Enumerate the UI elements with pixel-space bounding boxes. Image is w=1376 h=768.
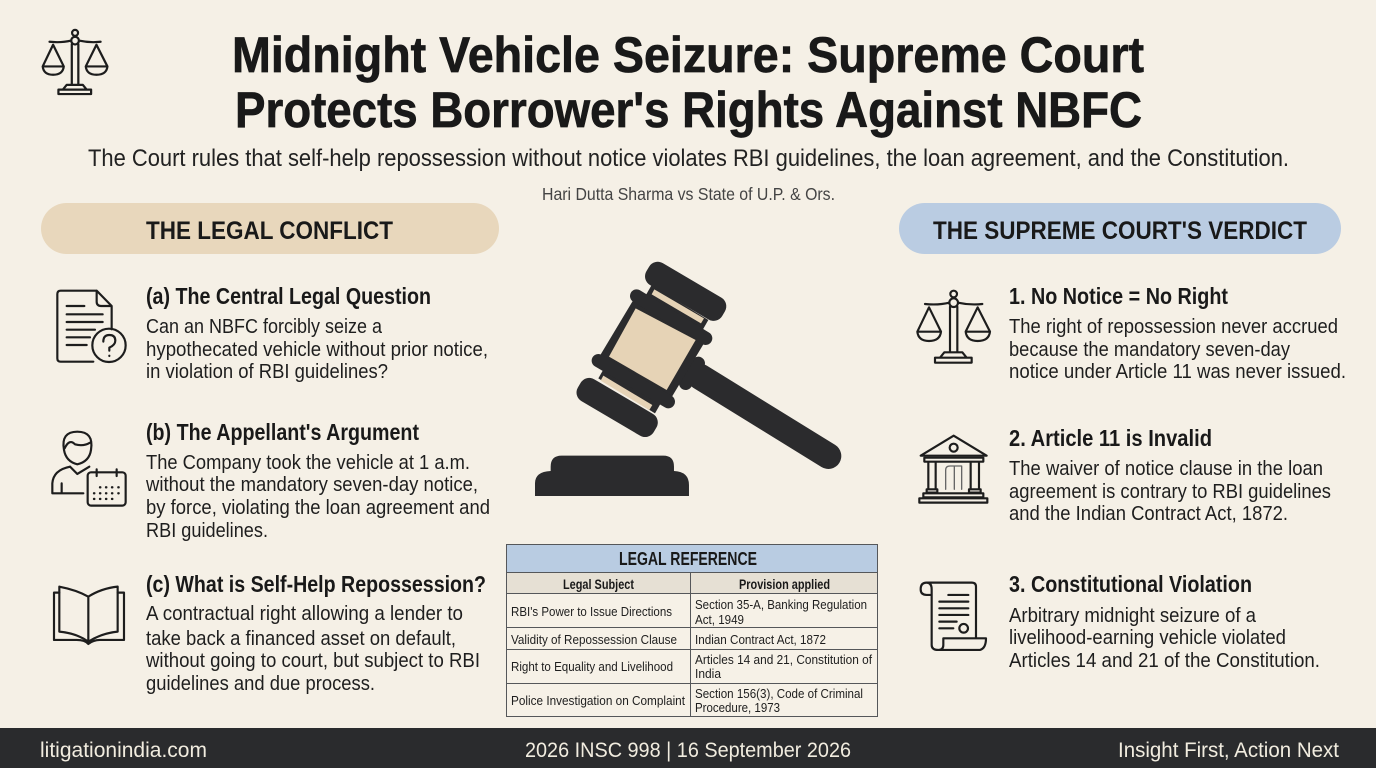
footer bar: 2026 INSC 998 | 16 September 2026	[525, 739, 851, 762]
table: legal reference: Act, 1949	[695, 612, 744, 627]
title	[232, 27, 1144, 138]
text block: self-help repossession	[145, 571, 486, 695]
icon: open book	[54, 587, 124, 644]
heading: the supreme court's verdict: THE SUPREME COURT'S VERDICT	[933, 217, 1307, 245]
text block: no notice no right	[1009, 283, 1346, 383]
text block: appellant's argument	[145, 419, 490, 542]
text block: central legal question: (a) The Central Legal Question	[146, 283, 431, 309]
text block: self-help repossession: without going to court, but subject to RBI	[145, 649, 480, 672]
table: legal reference: RBI's Power to Issue Directions	[511, 604, 672, 619]
table: legal reference: Provision applied	[739, 577, 830, 592]
icon: document with question mark	[57, 291, 126, 362]
table: legal reference	[506, 544, 878, 717]
text block: central legal question: hypothecated vehicle without prior notice,	[146, 338, 488, 361]
footer bar: litigationindia.com	[40, 739, 207, 762]
text block: no notice no right: notice under Article 11 was never issued.	[1009, 360, 1346, 383]
footer bar	[0, 728, 1376, 768]
case name: Hari Dutta Sharma vs State of U.P. & Ors.	[542, 184, 835, 204]
panel: the legal conflict	[41, 203, 499, 695]
text block: article 11 invalid: The waiver of notice clause in the loan	[1009, 457, 1323, 480]
text block: central legal question	[146, 283, 488, 383]
table: legal reference: Legal Subject	[563, 577, 634, 592]
footer bar: Insight First, Action Next	[1118, 739, 1339, 762]
icon: scales of justice	[917, 291, 990, 363]
table: legal reference: Police Investigation on Complaint	[511, 693, 685, 708]
title: Protects Borrower's Rights Against NBFC	[235, 82, 1142, 138]
icon: scroll	[921, 583, 986, 650]
text block: appellant's argument: RBI guidelines.	[146, 519, 268, 542]
table: legal reference: Section 35-A, Banking Regulation	[695, 597, 867, 612]
table: legal reference: Indian Contract Act, 1872	[695, 632, 826, 647]
heading: the supreme court's verdict	[899, 203, 1341, 254]
icon: court building	[919, 436, 987, 503]
text block: article 11 invalid: 2. Article 11 is Invalid	[1009, 425, 1212, 451]
text block: appellant's argument: (b) The Appellant's Argument	[146, 419, 419, 445]
text block: constitutional violation	[1009, 571, 1320, 672]
table: legal reference: Right to Equality and Livelihood	[511, 659, 673, 674]
text block: appellant's argument: The Company took the vehicle at 1 a.m.	[146, 451, 470, 474]
text block: self-help repossession: guidelines and due process.	[146, 672, 375, 695]
icon: scales of justice (header)	[43, 30, 107, 94]
table: legal reference: LEGAL REFERENCE	[619, 548, 757, 569]
text block: self-help repossession: A contractual right allowing a lender to	[146, 602, 463, 625]
text block: self-help repossession: (c) What is Self-Help Repossession?	[146, 571, 486, 597]
panel: the supreme court's verdict	[899, 203, 1346, 672]
table: legal reference: India	[695, 666, 722, 681]
heading: the legal conflict: THE LEGAL CONFLICT	[146, 217, 393, 245]
text block: central legal question: in violation of RBI guidelines?	[146, 360, 388, 383]
text block: self-help repossession: take back a financed asset on default,	[146, 627, 456, 650]
text block: constitutional violation: Articles 14 and 21 of the Constitution.	[1009, 649, 1320, 672]
text block: no notice no right: The right of repossession never accrued	[1009, 315, 1338, 338]
icon: gavel	[535, 258, 828, 496]
table: legal reference: Validity of Repossession Clause	[511, 632, 677, 647]
text block: constitutional violation: Arbitrary midnight seizure of a	[1009, 604, 1257, 627]
text block: no notice no right: 1. No Notice = No Right	[1009, 283, 1228, 309]
table: legal reference: Section 156(3), Code of Criminal	[695, 686, 863, 701]
text block: constitutional violation: 3. Constitutional Violation	[1009, 571, 1252, 597]
text block: constitutional violation: livelihood-earning vehicle violated	[1009, 626, 1286, 649]
text block: no notice no right: because the mandatory seven-day	[1009, 338, 1291, 361]
table: legal reference: Procedure, 1973	[695, 700, 780, 715]
table: legal reference: Articles 14 and 21, Constitution of	[695, 652, 872, 667]
text block: article 11 invalid: and the Indian Contract Act, 1872.	[1009, 502, 1288, 525]
text block: appellant's argument: by force, violating the loan agreement and	[146, 496, 490, 519]
text block: article 11 invalid	[1009, 425, 1331, 525]
text block: central legal question: Can an NBFC forcibly seize a	[146, 315, 383, 338]
title: Midnight Vehicle Seizure: Supreme Court	[232, 27, 1144, 83]
icon: person with calendar	[52, 432, 126, 506]
text block: appellant's argument: without the mandatory seven-day notice,	[145, 473, 478, 496]
heading: the legal conflict	[41, 203, 499, 254]
text block: article 11 invalid: agreement is contrary to RBI guidelines	[1009, 480, 1331, 503]
subtitle: The Court rules that self-help repossession without notice violates RBI guidelines, the loan agreement, and the Constitution.	[88, 145, 1289, 172]
